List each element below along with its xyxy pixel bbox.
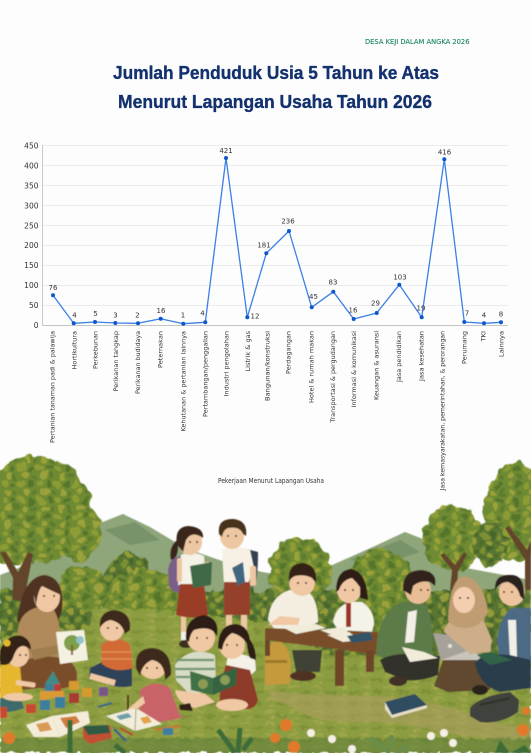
meadow — [0, 607, 531, 753]
y axis labels: 0 — [34, 321, 39, 330]
plants and flowers — [3, 707, 531, 753]
young man in blue shirt — [472, 575, 531, 695]
yellow backpack — [265, 642, 291, 685]
little girl in yellow — [0, 636, 36, 712]
y axis labels: 350 — [24, 182, 39, 190]
y axis labels — [24, 142, 39, 330]
category labels: Peternakan — [156, 331, 164, 368]
x axis title: Pekerjaan Menurut Lapangan Usaha — [218, 477, 324, 485]
young man in green jacket — [376, 570, 440, 686]
data labels: 8 — [499, 310, 503, 318]
category labels: Jasa pendidikan — [395, 331, 403, 383]
y axis labels: 150 — [24, 261, 39, 270]
forest band — [0, 538, 531, 660]
data labels: 19 — [417, 304, 425, 312]
young woman in hijab — [434, 576, 495, 692]
data labels: 2 — [135, 312, 140, 320]
boy in striped shirt — [175, 615, 217, 711]
data labels: 16 — [349, 306, 358, 314]
y axis labels: 200 — [24, 241, 39, 250]
data labels: 12 — [251, 312, 259, 320]
mountains — [0, 514, 531, 640]
y axis labels: 100 — [24, 281, 39, 290]
data labels: 236 — [281, 218, 295, 226]
category labels: Perikanan tangkap — [112, 331, 120, 391]
category labels: Kehutanan & pertanian lainnya — [180, 331, 188, 431]
toy blocks — [0, 671, 108, 718]
data labels: 83 — [329, 278, 337, 286]
category labels: Perdagangan — [284, 331, 292, 374]
category labels — [48, 330, 506, 491]
category labels: Transportasi & pergudangan — [329, 331, 337, 424]
axes — [42, 145, 508, 326]
line chart — [24, 142, 508, 491]
title: Jumlah Penduduk Usia 5 Tahun ke Atas — [113, 62, 439, 83]
tree: right middle — [423, 505, 483, 590]
category labels: Bangunan/konstruksi — [264, 331, 272, 401]
title: Menurut Lapangan Usaha Tahun 2026 — [118, 91, 432, 112]
y axis labels: 250 — [24, 222, 39, 230]
data labels: 76 — [49, 284, 58, 292]
data labels: 5 — [93, 310, 98, 318]
girl in red pinafore — [216, 624, 258, 711]
y axis labels: 300 — [24, 202, 39, 210]
teacher with picture book — [17, 575, 88, 690]
illustration: students learning outdoors — [0, 456, 531, 753]
category labels: Lainnya — [498, 331, 506, 357]
girl in pink dress — [106, 648, 186, 731]
y axis labels: 450 — [24, 142, 39, 150]
open book on grass — [106, 708, 162, 731]
data labels: 7 — [465, 310, 469, 318]
category labels: Listrik & gas — [244, 330, 252, 372]
category labels: Keuangan & asuransi — [372, 331, 380, 400]
data labels: 103 — [393, 274, 407, 282]
shrubs near teacher — [0, 599, 92, 631]
green book — [190, 667, 237, 695]
data labels: 4 — [72, 312, 77, 320]
girl writing at table — [333, 569, 374, 632]
gridlines — [42, 146, 508, 306]
category labels: Jasa kesehatan — [418, 331, 426, 382]
category labels: TKI — [480, 331, 488, 343]
data labels: 3 — [113, 312, 118, 320]
category labels: Jasa kemasyarakatan, pemerintahan, & perorangan — [438, 331, 446, 491]
category labels: Pertanian tanaman padi & palawija — [48, 331, 56, 443]
data labels: 4 — [482, 312, 487, 320]
title — [113, 62, 439, 112]
data labels: 45 — [309, 293, 318, 301]
data line — [53, 158, 501, 324]
category labels: Hotel & rumah makan — [308, 331, 316, 403]
standing boy with backpack — [219, 519, 258, 638]
y axis labels: 400 — [24, 162, 39, 170]
data labels: 421 — [219, 147, 233, 155]
picture book — [56, 630, 88, 664]
tree: left large — [0, 456, 102, 612]
data labels: 4 — [200, 310, 205, 318]
data points — [51, 156, 503, 326]
faces: eyes of the characters — [19, 535, 513, 669]
wooden table with books — [265, 624, 378, 686]
category labels: Industri pengolahan — [222, 331, 230, 396]
category labels: Perkebunan — [92, 331, 100, 369]
data labels — [49, 147, 503, 320]
standing girl with purple backpack — [168, 526, 212, 648]
category labels: Pertambangan/penggalian — [202, 331, 210, 417]
boy writing at table — [268, 563, 322, 681]
category labels: Informasi & komunikasi — [350, 331, 358, 408]
stacked blue books — [385, 694, 427, 718]
tree: right edge — [472, 462, 531, 590]
category labels: Perumang — [460, 331, 468, 364]
data labels: 181 — [257, 242, 271, 250]
boy in orange shirt — [89, 610, 133, 687]
y axis labels: 50 — [29, 301, 39, 310]
laptop — [433, 633, 482, 660]
data labels: 16 — [157, 307, 166, 315]
dark backpack on grass — [470, 692, 519, 723]
books and crayons on grass — [26, 703, 180, 744]
category labels: Perikanan budidaya — [134, 331, 142, 394]
data labels: 1 — [181, 312, 185, 320]
data labels: 416 — [438, 148, 452, 156]
category labels: Hortikultura — [70, 331, 78, 370]
running header: DESA KEJI DALAM ANGKA 2026 — [365, 38, 470, 46]
data labels: 29 — [371, 300, 380, 308]
